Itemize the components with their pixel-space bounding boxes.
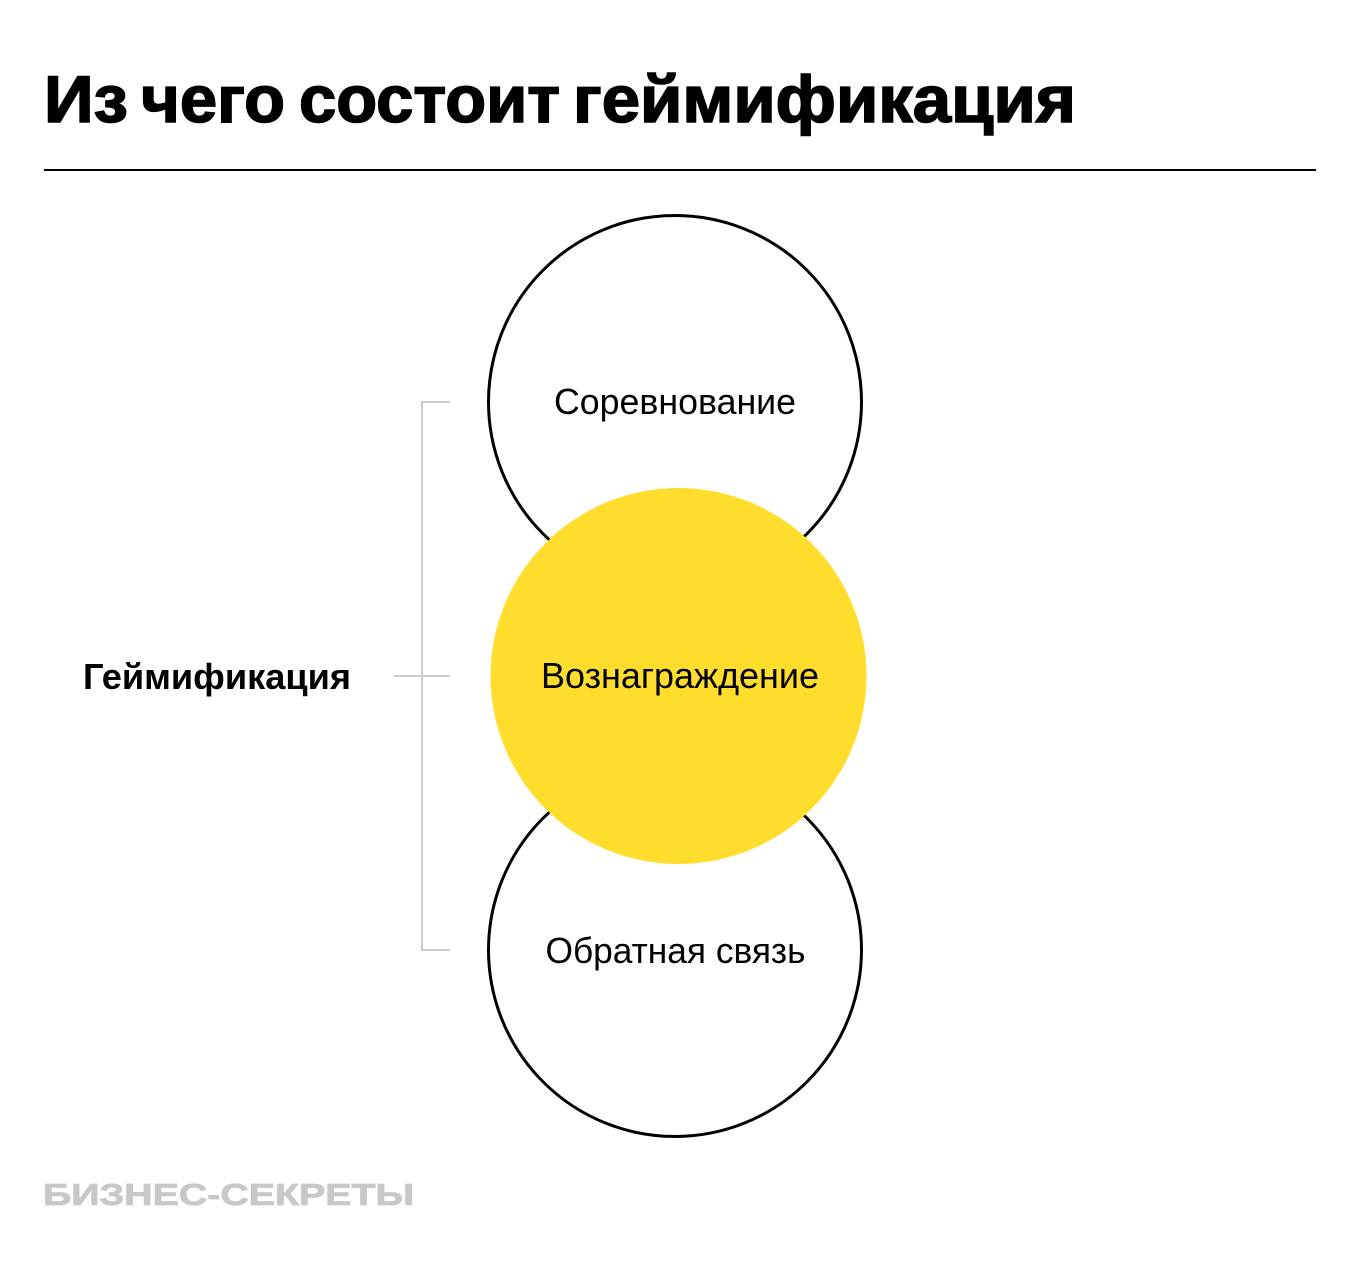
circle: Обратная связь xyxy=(488,764,862,1136)
title xyxy=(44,62,1076,136)
logo: Бизнес-секреты: БИЗНЕС-СЕКРЕТЫ xyxy=(43,1177,414,1212)
circle: Соревнование: Соревнование xyxy=(554,381,796,422)
label: Геймификация: Геймификация xyxy=(83,656,351,697)
circle: Вознаграждение: Вознаграждение xyxy=(541,655,819,696)
bracket xyxy=(394,402,450,950)
circle: Вознаграждение xyxy=(490,488,866,864)
title: чего xyxy=(141,62,285,136)
circle: Соревнование xyxy=(488,216,862,588)
title: состоит xyxy=(299,62,560,136)
circle: Обратная связь: Обратная связь xyxy=(546,930,806,971)
title: Из xyxy=(44,62,128,136)
title: геймификация xyxy=(573,62,1076,136)
